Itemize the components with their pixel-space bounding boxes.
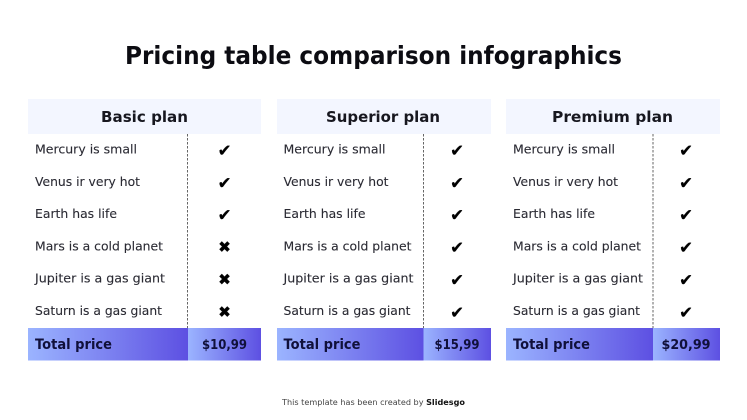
row: Jupiter	[282, 270, 464, 290]
row: Mercury: Mercury is small	[35, 142, 137, 156]
row: Earth: Earth has life	[284, 206, 366, 221]
row: Saturn	[513, 303, 693, 322]
row: Mars: Mars is a cold planet	[284, 238, 412, 254]
row: Mercury: Mercury is small	[284, 142, 386, 156]
title: Pricing table comparison infographics	[125, 41, 622, 70]
total price row: Total price	[284, 337, 360, 353]
row: Venus	[35, 174, 231, 192]
row: Mercury: Mercury is small	[513, 142, 615, 156]
row: Mars	[35, 238, 231, 256]
row: Jupiter: ✔	[450, 270, 464, 290]
row: Jupiter: ✖	[218, 270, 231, 288]
row: Earth	[35, 206, 231, 224]
row: Mercury: ✔	[679, 141, 693, 160]
panel: Premium plan	[506, 99, 720, 360]
row: Venus: ✔	[679, 174, 693, 192]
row: Jupiter: Jupiter is a gas giant	[512, 270, 643, 286]
total price row: Total price	[35, 337, 112, 353]
row: Mercury: ✔	[450, 141, 464, 160]
row: Venus	[513, 174, 693, 192]
row: Venus: Venus ir very hot	[513, 174, 618, 189]
row: Mercury: ✔	[218, 141, 231, 160]
footer credit: This template has been created by Slidesgo	[281, 398, 465, 407]
row: Earth: ✔	[450, 206, 464, 224]
row: Mercury	[513, 141, 693, 160]
panel: Superior plan	[277, 99, 491, 360]
row: Saturn: Saturn is a gas giant	[284, 303, 411, 318]
row: Mars	[284, 238, 464, 257]
total price row	[28, 328, 261, 360]
total price row: $20,99	[662, 337, 710, 353]
row: Earth	[513, 206, 693, 224]
row: Mars: ✖	[218, 238, 231, 256]
row: Earth: Earth has life	[513, 206, 595, 221]
total price row: Total price	[513, 337, 590, 353]
heading: Basic plan: Basic plan	[101, 108, 188, 126]
row: Mercury	[35, 141, 231, 160]
total price row	[506, 328, 720, 360]
row: Earth	[284, 206, 464, 224]
row: Venus	[284, 174, 464, 192]
heading: Superior plan	[277, 99, 491, 134]
row: Earth: Earth has life	[35, 206, 117, 221]
panel: Basic plan	[28, 99, 261, 360]
heading: Premium plan: Premium plan	[552, 108, 673, 126]
row: Venus: ✔	[450, 174, 464, 192]
row: Mercury	[284, 141, 464, 160]
row: Jupiter: Jupiter is a gas giant	[34, 270, 165, 286]
row: Earth: ✔	[679, 206, 693, 224]
row: Saturn: Saturn is a gas giant	[513, 303, 640, 318]
row: Mars	[513, 238, 693, 257]
row: Saturn	[35, 303, 231, 321]
row: Mars: ✔	[679, 238, 693, 257]
heading: Basic plan	[28, 99, 261, 134]
row: Saturn	[284, 303, 464, 322]
row: Earth: ✔	[218, 206, 231, 224]
row: Venus: Venus ir very hot	[35, 174, 140, 189]
row: Saturn: ✔	[679, 303, 693, 322]
row: Saturn: ✖	[218, 303, 231, 321]
row: Jupiter: Jupiter is a gas giant	[282, 270, 414, 286]
row: Mars: Mars is a cold planet	[35, 238, 163, 254]
heading: Premium plan	[506, 99, 720, 134]
row: Jupiter: ✔	[679, 270, 693, 290]
heading: Superior plan: Superior plan	[326, 108, 440, 126]
row: Saturn: ✔	[450, 303, 464, 322]
row: Venus: ✔	[218, 174, 231, 192]
row: Jupiter	[34, 270, 231, 288]
total price row: $10,99	[202, 337, 247, 353]
total price row	[277, 328, 491, 360]
row: Venus: Venus ir very hot	[284, 174, 389, 189]
row: Mars: Mars is a cold planet	[513, 238, 641, 254]
total price row: $15,99	[434, 337, 480, 353]
row: Jupiter	[512, 270, 693, 290]
row: Mars: ✔	[450, 238, 464, 257]
row: Saturn: Saturn is a gas giant	[35, 303, 162, 318]
